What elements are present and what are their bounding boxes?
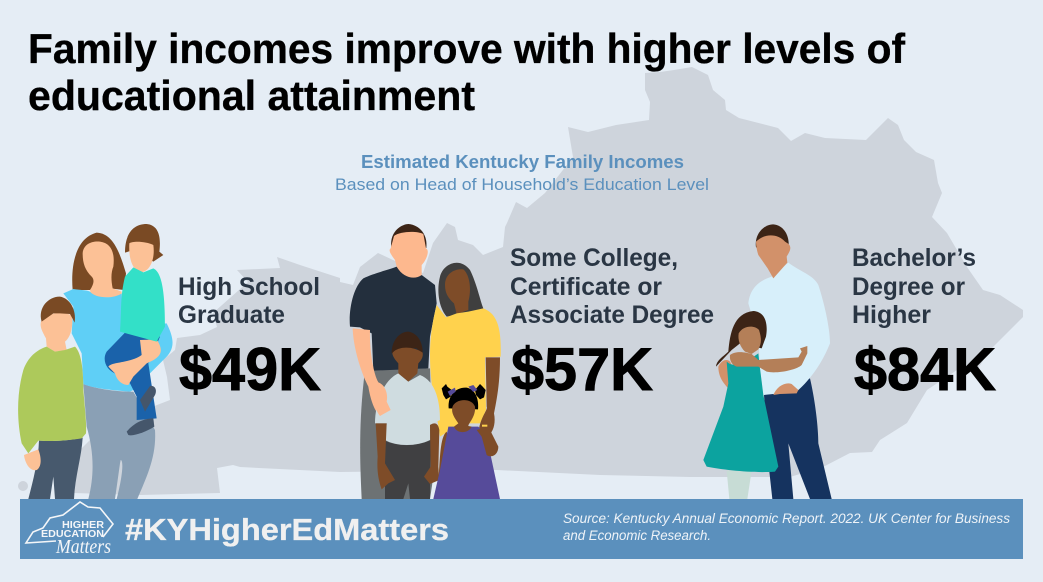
income block: bachelor's degree: Higher [852,301,931,329]
title: educational attainment [28,72,475,119]
income block: high school graduate [178,273,321,403]
footer banner [20,499,1023,559]
income block: some college: $57K [511,336,653,403]
title: Family incomes improve with higher levels of [28,25,905,72]
illustration: two parents with two children [350,224,501,499]
logo: Higher Education Matters [26,502,113,558]
income block: bachelor's degree: $84K [854,336,996,403]
income block: high school graduate: High School [178,273,320,301]
income block: bachelor's degree: Bachelor’s [852,244,976,272]
income block: some college: Certificate or [510,273,662,301]
illustration: father and daughter [703,224,832,499]
source note: and Economic Research. [563,528,711,543]
Kentucky map silhouette [18,67,1023,495]
logo: Higher Education Matters: EDUCATION [41,529,104,540]
income block: high school graduate: $49K [179,336,321,403]
illustration: mother with two children [18,224,173,499]
source note [563,511,1010,543]
income block: bachelor's degree [852,244,996,403]
title [28,25,905,119]
subtitle: Estimated Kentucky Family Incomes [361,152,684,172]
income block: some college: Some College, [510,244,678,272]
income block: some college: Associate Degree [510,301,714,329]
source note: Source: Kentucky Annual Economic Report. 2022. UK Center for Business [563,511,1010,526]
logo: Higher Education Matters: Matters [55,536,111,558]
income block: bachelor's degree: Degree or [852,273,965,301]
income block: high school graduate: Graduate [178,301,285,329]
subtitle: Based on Head of Household’s Education Level [335,176,709,194]
subtitle [335,152,709,194]
hashtag: #KYHigherEdMatters [125,512,449,547]
logo: Higher Education Matters: HIGHER [62,520,105,531]
income block: some college [510,244,714,403]
